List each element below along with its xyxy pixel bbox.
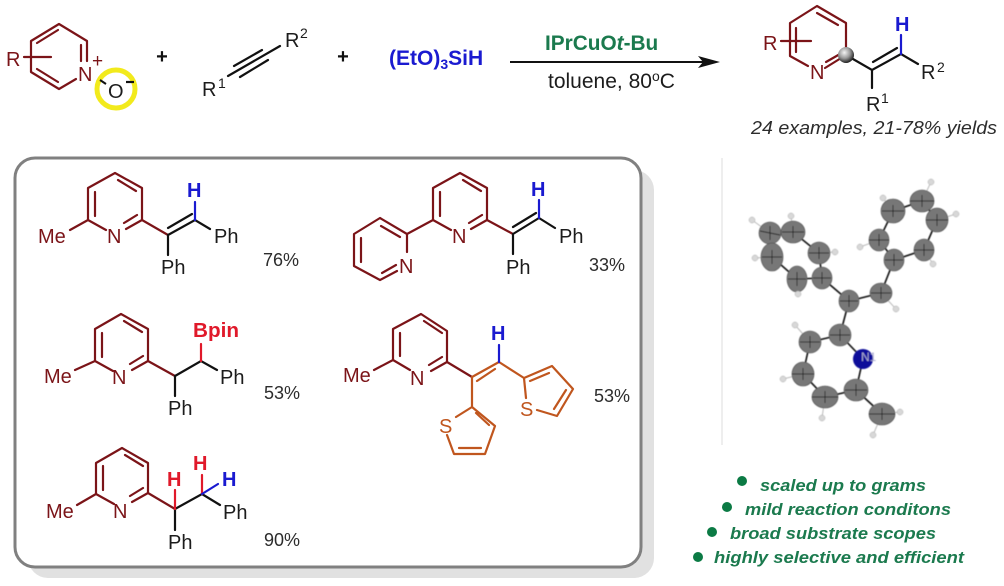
molecule: 90%: H	[167, 469, 181, 491]
yellow highlight circle	[97, 70, 135, 108]
atoms	[749, 179, 959, 438]
molecule: 53% Bpin	[44, 314, 300, 420]
reactant: pyridine N-oxide	[6, 24, 135, 108]
feature 4: highly selective and efficient	[714, 549, 966, 567]
product: alkenyl pyridine: R	[921, 62, 935, 84]
reactant: alkyne: 2	[300, 25, 308, 41]
molecule: 53% thiophene: H	[491, 323, 505, 345]
molecule: 33%: H	[531, 179, 545, 201]
feature 3: broad substrate scopes	[730, 525, 936, 543]
molecule: 76%	[38, 173, 299, 279]
reaction arrow with conditions: o	[652, 68, 660, 84]
molecule: 33%: Ph	[506, 257, 530, 279]
reagent: triethoxysilane: SiH	[448, 47, 483, 70]
molecule: 90%: 90%	[264, 530, 300, 550]
plus sign 1: +	[156, 46, 168, 68]
product: alkenyl pyridine: R	[866, 94, 880, 116]
molecule: 53% Bpin: Me	[44, 366, 72, 388]
product scope summary: 24 examples, 21-78% yields	[750, 118, 997, 138]
crystal structure (ORTEP)	[749, 179, 959, 438]
divider line	[721, 158, 723, 445]
reactant: pyridine N-oxide: N	[78, 64, 92, 86]
reagent: triethoxysilane: 3	[440, 56, 448, 72]
reactant: alkyne: 1	[218, 75, 226, 91]
molecule: 53% thiophene: 53%	[594, 386, 630, 406]
reactant: pyridine N-oxide: O	[108, 81, 124, 103]
molecule: 53% thiophene: N	[410, 368, 424, 390]
molecule: 90%: Ph	[223, 502, 247, 524]
reactant: alkyne: R	[285, 30, 299, 52]
panel: substrate scope	[15, 158, 654, 578]
product: alkenyl pyridine: R	[763, 33, 777, 55]
reaction arrow with conditions: IPrCuOt-Bu	[545, 32, 658, 55]
reaction arrow with conditions: C	[660, 70, 675, 93]
reagent: triethoxysilane: (EtO)	[389, 47, 440, 70]
molecule: 76%: Me	[38, 226, 66, 248]
molecule: 33%	[354, 173, 625, 280]
reaction arrow with conditions: toluene, 80	[548, 70, 652, 93]
molecule: 33%: Ph	[559, 226, 583, 248]
molecule: 90%: Ph	[168, 532, 192, 554]
reaction arrow with conditions	[510, 32, 720, 93]
molecule: 33%: 33%	[589, 255, 625, 275]
molecule: 90%: Me	[46, 501, 74, 523]
molecule: 76%: H	[187, 180, 201, 202]
product: alkenyl pyridine	[763, 6, 945, 116]
molecule: 53% Bpin: Ph	[168, 398, 192, 420]
molecule: 76%: N	[107, 226, 121, 248]
molecule: 33%: N	[452, 226, 466, 248]
plus sign 2: +	[337, 46, 349, 68]
molecule: 53% thiophene: S	[439, 416, 452, 438]
molecule: 53% thiophene: S	[520, 399, 533, 421]
molecule: 76%: Ph	[214, 226, 238, 248]
feature 1: scaled up to grams	[760, 477, 926, 495]
molecule: 90%: N	[113, 501, 127, 523]
molecule: 53% thiophene	[343, 314, 630, 454]
product: alkenyl pyridine: 2	[937, 59, 945, 75]
molecule: 90%: H	[222, 469, 236, 491]
reactant: alkyne: R	[202, 79, 216, 101]
molecule: 53% thiophene: Me	[343, 365, 371, 387]
atoms: N1	[861, 350, 877, 364]
reactant: alkyne	[202, 25, 308, 101]
product: alkenyl pyridine: H	[895, 14, 909, 36]
reactant: pyridine N-oxide: +	[92, 51, 103, 72]
key features list	[693, 476, 966, 567]
molecule: 53% Bpin: N	[112, 367, 126, 389]
molecule: 90%: H	[193, 453, 207, 475]
molecule: 76%: 76%	[263, 250, 299, 270]
product: alkenyl pyridine: N	[810, 62, 824, 84]
molecule: 33%: N	[399, 256, 413, 278]
molecule: 53% Bpin: 53%	[264, 383, 300, 403]
feature 2: mild reaction conditons	[745, 501, 951, 519]
molecule: 53% Bpin: Ph	[220, 367, 244, 389]
product: alkenyl pyridine: 1	[881, 90, 889, 106]
molecule: 76%: Ph	[161, 257, 185, 279]
reactant: pyridine N-oxide: R	[6, 49, 20, 71]
molecule: 90%	[46, 448, 300, 554]
molecule: 53% Bpin: Bpin	[193, 320, 239, 342]
highlighted carbon ball	[838, 47, 854, 63]
